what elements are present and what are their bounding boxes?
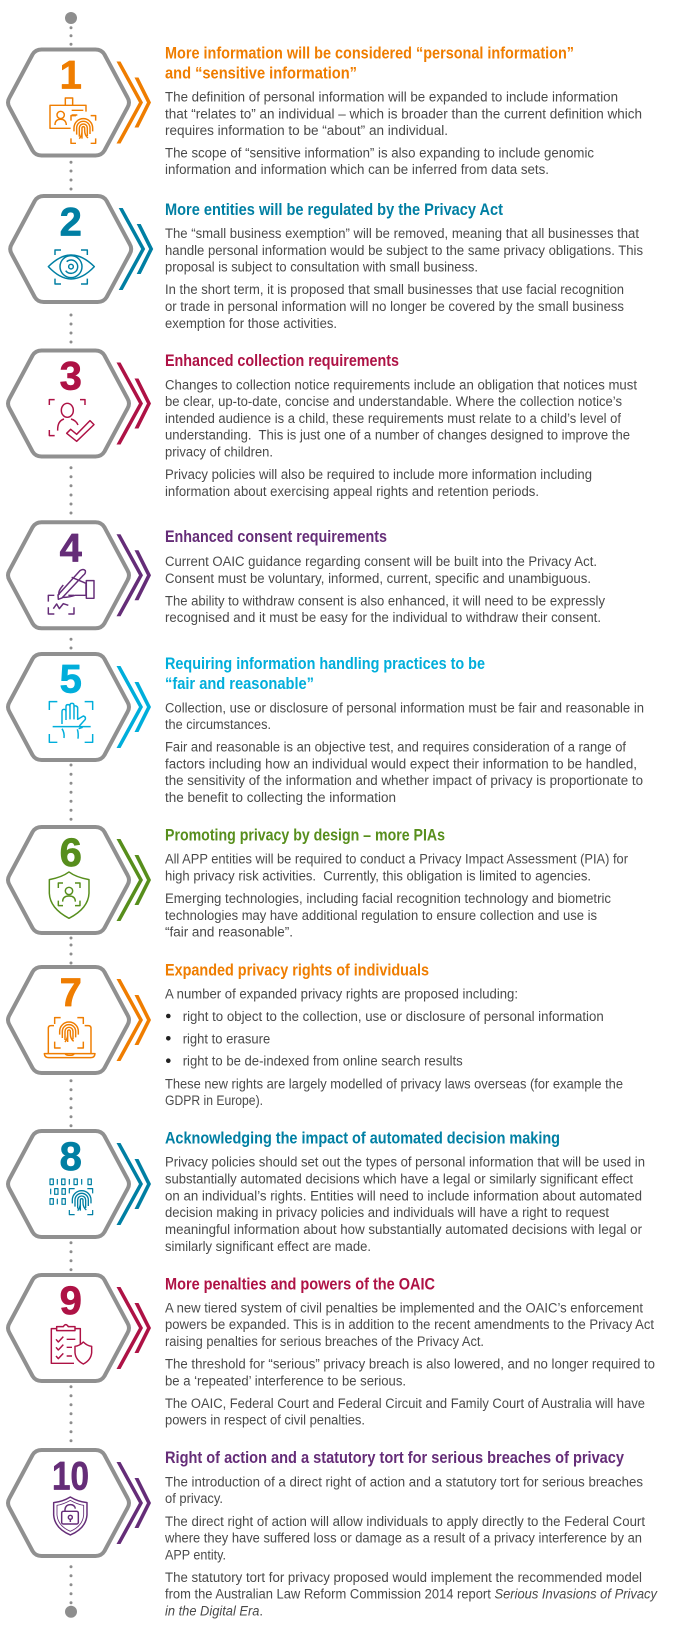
text: step 10	[164, 1448, 658, 1618]
body 5	[165, 700, 644, 805]
body 1: information and information which can be inferred from data sets.	[165, 162, 549, 177]
chevrons 2	[119, 208, 153, 290]
badge: step 7	[8, 967, 151, 1073]
body 9: The threshold for “serious” privacy breach is also lowered, and no longer required to	[165, 1357, 655, 1372]
body 2: or trade in personal information will no longer be covered by the small business	[165, 299, 624, 314]
body 1: requires information to be “about” an individual.	[165, 123, 448, 138]
body 1: The scope of “sensitive information” is also expanding to include genomic	[165, 145, 594, 160]
chevrons 5	[116, 666, 151, 748]
icon: checklist clipboard and shield	[51, 1325, 92, 1364]
body 8: Privacy policies should set out the types of personal information that will be used in	[165, 1155, 645, 1170]
chevrons 1	[116, 62, 151, 144]
body 6: All APP entities will be required to conduct a Privacy Impact Assessment (PIA) for	[165, 852, 628, 867]
body 5: factors including how an individual would expect their information to be handled,	[165, 756, 637, 771]
body 2: handle personal information would be subject to the same privacy obligations. This	[165, 243, 643, 258]
hexagon 4	[8, 522, 129, 628]
body 4: Consent must be voluntary, informed, current, specific and unambiguous.	[165, 571, 591, 586]
chevrons 7	[116, 979, 151, 1061]
body 4: recognised and it must be easy for the individual to withdraw their consent.	[165, 610, 601, 625]
body 2	[165, 226, 643, 331]
body 7: GDPR in Europe).	[165, 1093, 263, 1108]
body 1	[165, 90, 642, 177]
body 7: right to erasure	[183, 1031, 270, 1046]
icon: ID badge with fingerprint	[50, 98, 96, 143]
body 9: powers in respect of civil penalties.	[165, 1413, 365, 1428]
body 6: Emerging technologies, including facial recognition technology and biometric	[165, 891, 611, 906]
timeline: dotted vertical line with end dots	[65, 12, 77, 1618]
body 7: These new rights are largely modelled of privacy laws overseas (for example the	[165, 1076, 623, 1091]
icon: binary data and fingerprint	[50, 1179, 93, 1215]
heading 1: More information will be considered “personal information”	[165, 43, 574, 62]
text: step 9	[165, 1274, 655, 1428]
body 10: The direct right of action will allow individuals to apply directly to the Federal Court	[165, 1514, 645, 1529]
badge: step 4	[8, 522, 151, 628]
body 4: The ability to withdraw consent is also enhanced, it will need to be expressly	[165, 593, 605, 608]
heading 10: Right of action and a statutory tort for serious breaches of privacy	[165, 1448, 625, 1467]
number 9: 9	[60, 1279, 82, 1323]
body 3: Privacy policies will also be required to include more information including	[165, 467, 592, 482]
body 9	[165, 1300, 655, 1428]
heading 5: Requiring information handling practices to be	[165, 654, 485, 673]
text: step 3	[165, 351, 637, 499]
chevrons 4	[116, 534, 151, 616]
number 2: 2	[60, 200, 82, 244]
icon: person with check mark	[49, 400, 94, 441]
body 10: where they have suffered loss or damage as a result of a privacy interference by an	[164, 1531, 642, 1546]
body 7: right to be de-indexed from online search results	[183, 1054, 463, 1069]
body 9: A new tiered system of civil penalties be implemented and the OAIC’s enforcement	[165, 1300, 643, 1315]
badge: step 2	[10, 196, 153, 302]
heading 1: and “sensitive information”	[165, 63, 357, 82]
body 3: information about exercising appeal rights and retention periods.	[165, 484, 539, 499]
text: step 8	[165, 1128, 645, 1254]
number 8: 8	[60, 1135, 82, 1179]
hexagon 10	[8, 1450, 129, 1556]
text: step 1	[165, 43, 642, 177]
body 5: Collection, use or disclosure of personal information must be fair and reasonable in	[165, 700, 644, 715]
number 1: 1	[60, 54, 82, 98]
hexagon 2	[10, 196, 131, 302]
body 8: decision making in privacy policies and individuals will have a right to request	[165, 1205, 609, 1220]
icon: hand scan	[49, 702, 93, 742]
badge: step 5	[8, 654, 151, 760]
text: step 5	[165, 654, 644, 805]
body 2: In the short term, it is proposed that small businesses that use facial recognition	[165, 282, 624, 297]
number 6: 6	[60, 831, 82, 875]
body 8: meaningful information about how substantially automated decisions with legal or	[165, 1222, 642, 1237]
body 4: Current OAIC guidance regarding consent will be built into the Privacy Act.	[165, 554, 597, 569]
body 5: Fair and reasonable is an objective test, and requires consideration of a range of	[165, 740, 626, 755]
heading 4: Enhanced consent requirements	[165, 527, 387, 546]
body 6: high privacy risk activities. Currently, this obligation is limited to agencies.	[165, 868, 591, 883]
icon: laptop with fingerprint	[44, 1018, 95, 1058]
chevrons 10	[116, 1462, 151, 1544]
body 2: proposal is subject to consultation with small business.	[165, 260, 478, 275]
body 8	[165, 1155, 645, 1254]
body 7: A number of expanded privacy rights are proposed including:	[165, 986, 518, 1001]
hexagon 7	[8, 967, 129, 1073]
body 8: on an individual’s rights. Entities will need to include information about automated	[165, 1188, 642, 1203]
body 3: Changes to collection notice requirements include an obligation that notices must	[165, 377, 637, 392]
badge: step 6	[8, 827, 151, 933]
chevrons 3	[116, 362, 151, 444]
body 10: The introduction of a direct right of action and a statutory tort for serious breaches	[165, 1474, 643, 1489]
hexagon 8	[8, 1131, 129, 1237]
body 2: The “small business exemption” will be removed, meaning that all businesses that	[165, 226, 639, 241]
text: step 2	[165, 200, 643, 331]
badge: step 1	[8, 50, 151, 156]
body 6: “fair and reasonable”.	[165, 925, 293, 940]
chevrons 6	[116, 839, 151, 921]
badge: step 9	[8, 1275, 151, 1381]
number 5: 5	[60, 658, 82, 702]
chevrons 8	[116, 1143, 151, 1225]
badge: step 10	[8, 1450, 151, 1556]
body 7	[165, 986, 623, 1108]
body 4	[165, 554, 605, 625]
body 8: similarly significant effect are made.	[165, 1239, 371, 1254]
icon: eye scan	[48, 250, 94, 284]
text: step 7	[165, 960, 623, 1108]
number 7: 7	[60, 971, 82, 1015]
body 10: The statutory tort for privacy proposed would implement the recommended model	[165, 1570, 642, 1585]
body 3: be clear, up-to-date, concise and understandable. Where the collection notice’s	[165, 394, 622, 409]
body 8: substantially automated decisions which have a legal or similarly significant effect	[165, 1172, 633, 1187]
heading 6: Promoting privacy by design – more PIAs	[165, 826, 445, 845]
body 6: technologies may have additional regulation to ensure collection and use is	[165, 908, 597, 923]
body 7: right to object to the collection, use or disclosure of personal information	[183, 1009, 604, 1024]
text: step 4	[165, 527, 605, 625]
hexagon 9	[8, 1275, 129, 1381]
body 5: the benefit to collecting the information	[165, 790, 396, 805]
body 3	[165, 377, 637, 499]
body 3: privacy of children.	[165, 444, 273, 460]
hexagon 1	[8, 50, 129, 156]
hexagon 5	[8, 654, 129, 760]
body 9: powers be expanded. This is in addition to the recent amendments to the Privacy Act	[165, 1317, 654, 1332]
body 3: intended audience is a child, these requirements must relate to a child’s level of	[165, 411, 621, 426]
body 9: The OAIC, Federal Court and Federal Circuit and Family Court of Australia will have	[165, 1396, 645, 1411]
number 10: 10	[52, 1454, 89, 1498]
body 10	[164, 1474, 658, 1618]
heading 9: More penalties and powers of the OAIC	[165, 1274, 435, 1293]
icon: shield with padlock	[54, 1497, 87, 1535]
hexagon 6	[8, 827, 129, 933]
body 5: the sensitivity of the information and whether impact of privacy is proportionate to	[165, 773, 643, 788]
body 10: from the Australian Law Reform Commission 2014 report Serious Invasions of Privacy	[165, 1587, 658, 1602]
chevrons 9	[116, 1287, 151, 1369]
heading 3: Enhanced collection requirements	[165, 351, 399, 370]
body 1: The definition of personal information will be expanded to include information	[165, 90, 618, 105]
heading 2: More entities will be regulated by the Privacy Act	[165, 200, 503, 219]
icon: shield with face scan	[49, 872, 89, 918]
body 10: of privacy.	[165, 1491, 223, 1506]
body 6	[165, 852, 628, 940]
number 4: 4	[60, 527, 83, 571]
heading 7: Expanded privacy rights of individuals	[165, 960, 429, 979]
badge: step 8	[8, 1131, 151, 1237]
body 9: raising penalties for serious breaches of the Privacy Act.	[165, 1334, 484, 1349]
body 10: APP entity.	[165, 1547, 226, 1562]
body 2: exemption for those activities.	[165, 316, 337, 331]
body 5: the circumstances.	[165, 717, 271, 732]
body 3: understanding. This is just one of a number of changes designed to improve the	[165, 428, 630, 443]
hexagon 3	[8, 350, 129, 456]
text: step 6	[165, 826, 628, 940]
body 9: be a ‘repeated’ interference to be serious.	[165, 1373, 406, 1388]
icon: hand signing	[48, 569, 94, 614]
number 3: 3	[60, 355, 82, 399]
heading 8: Acknowledging the impact of automated decision making	[165, 1128, 560, 1147]
badge: step 3	[8, 350, 151, 456]
body 1: that “relates to” an individual – which is broader than the current definition which	[165, 106, 642, 121]
heading 5: “fair and reasonable”	[165, 674, 314, 693]
body 10: in the Digital Era.	[165, 1603, 263, 1618]
